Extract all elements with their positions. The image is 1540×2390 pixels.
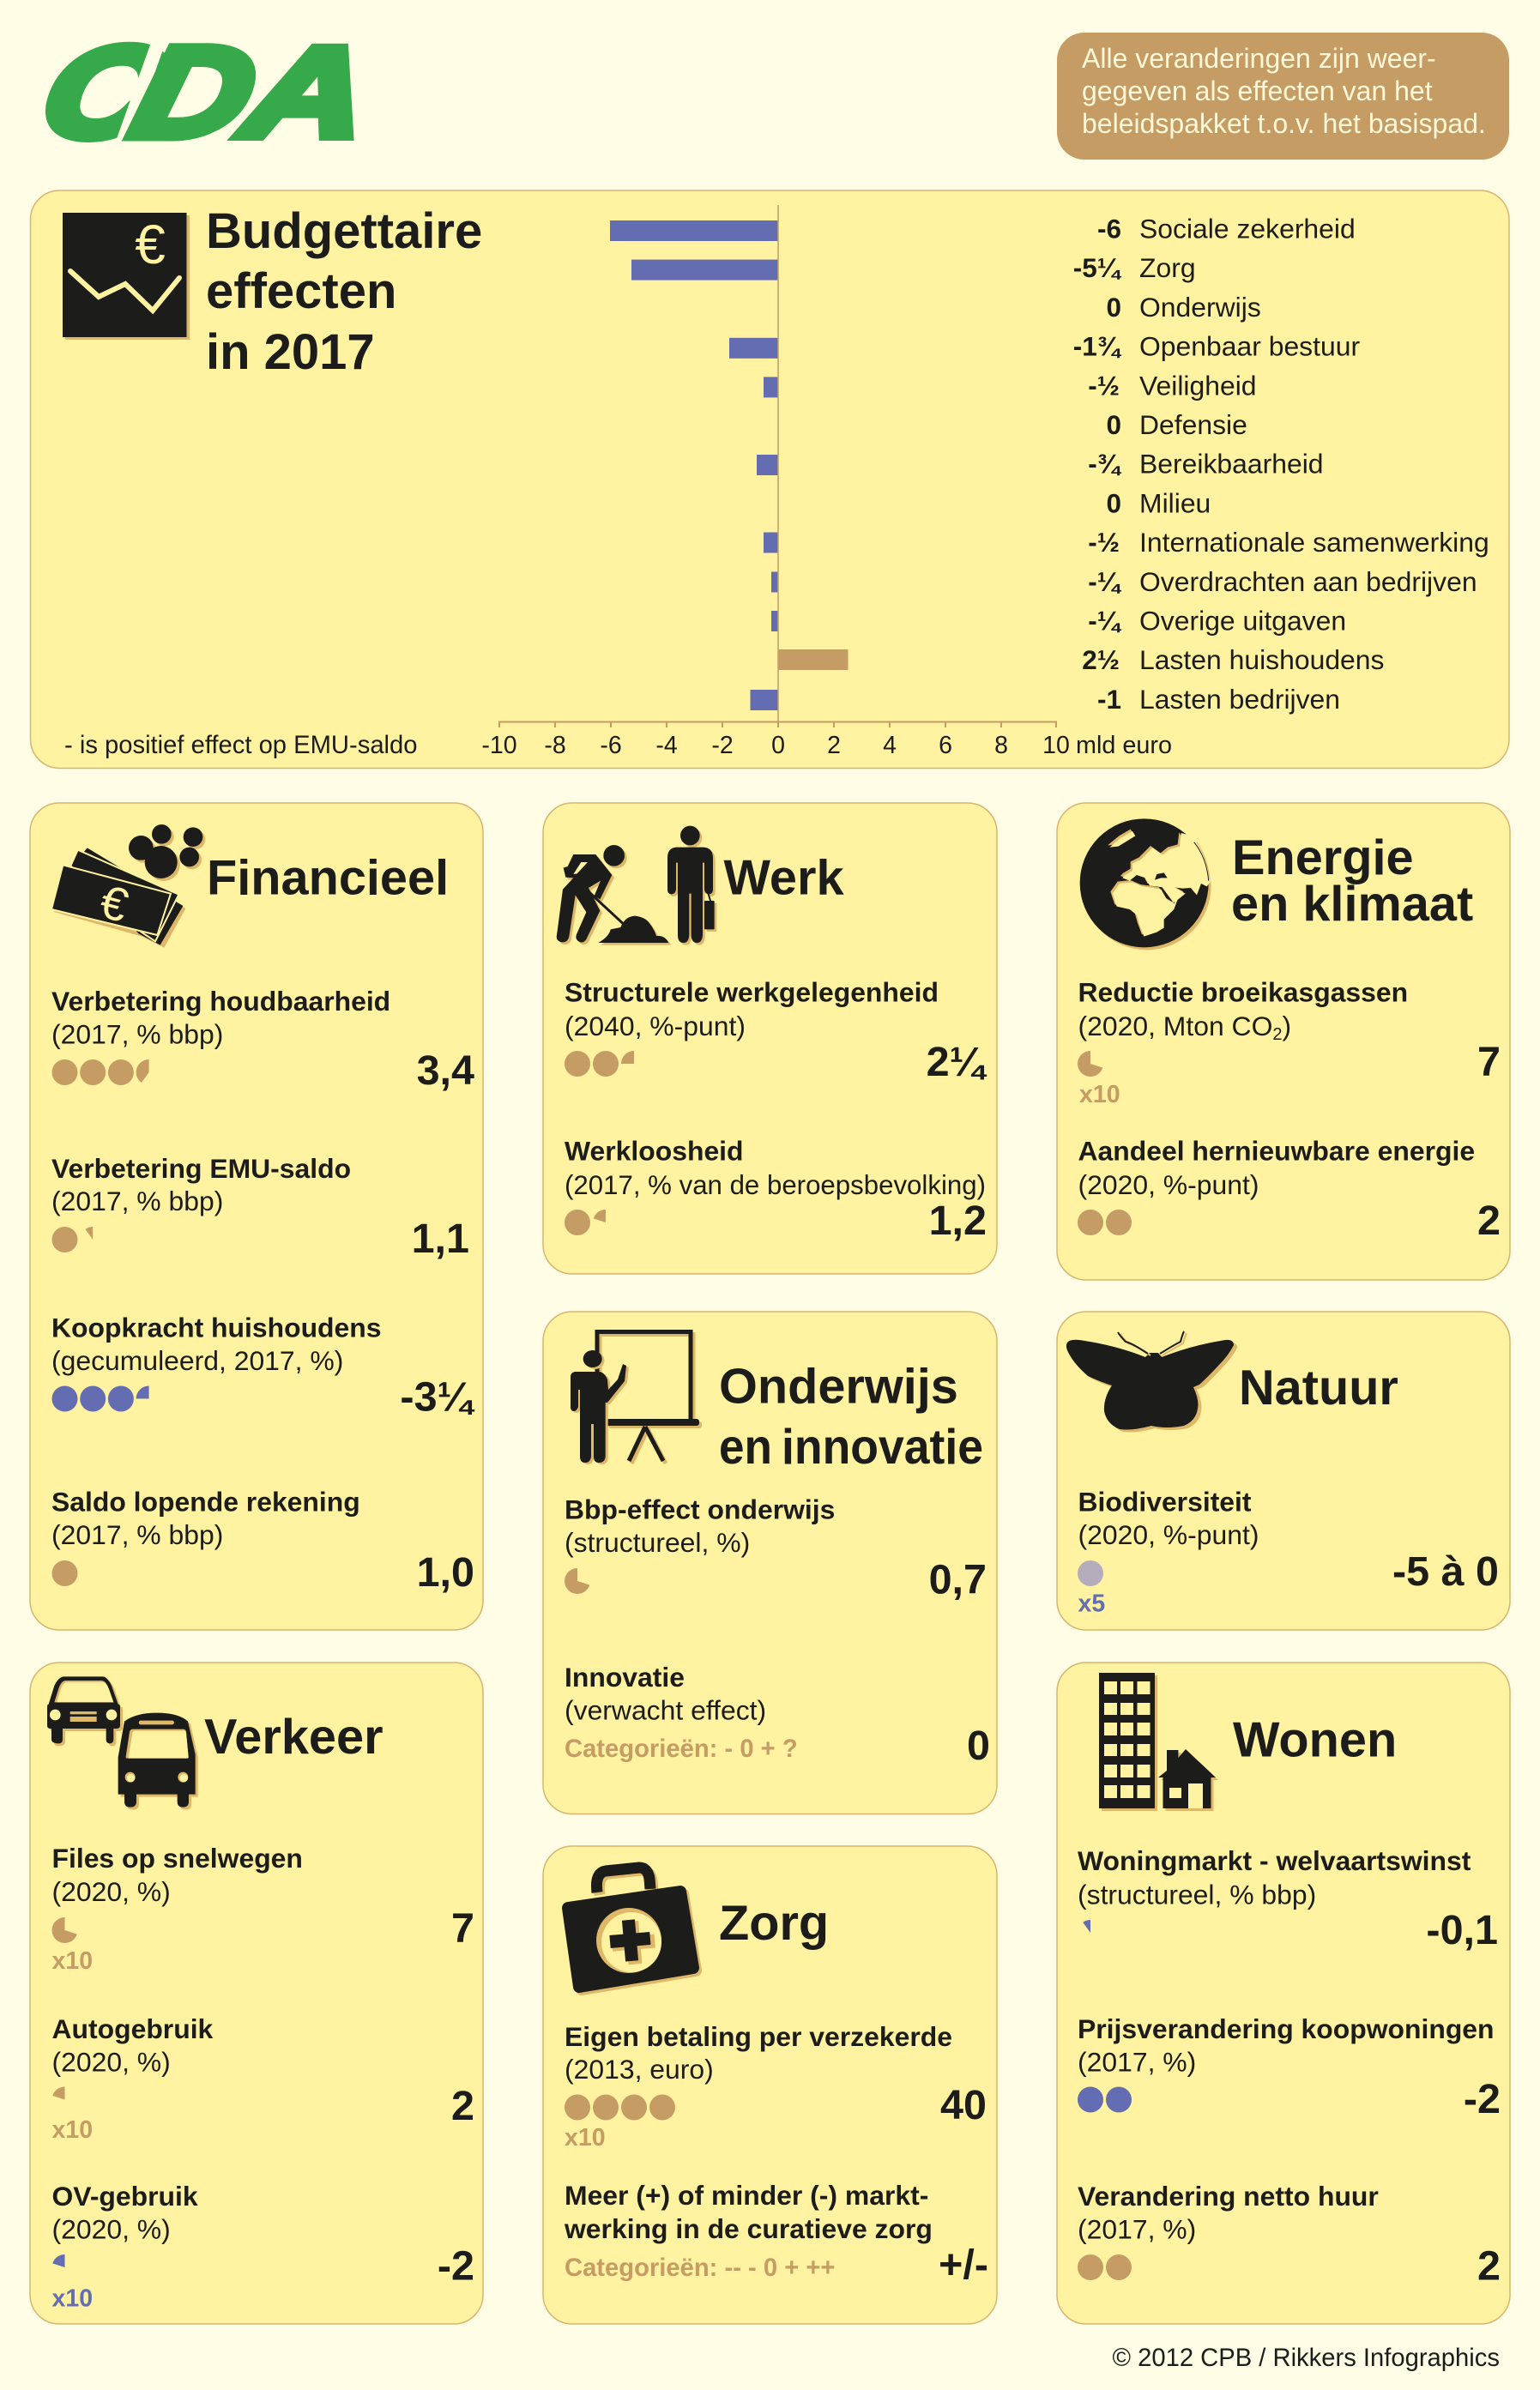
logo: CDA: C	[29, 20, 179, 164]
row: verbetering EMU-saldo: (2017, % bbp)	[51, 1186, 223, 1216]
panel: budgettaire effecten	[31, 190, 1509, 769]
heading: onderwijs en innovatie: innovatie	[782, 1420, 983, 1475]
row: verandering netto huur: (2017, %)	[1078, 2213, 1196, 2244]
heading: budgettaire effecten in 2017: in 2017	[206, 324, 375, 380]
bar chart: budgettaire effecten: 6	[939, 732, 952, 759]
values and category labels: -1	[1097, 684, 1121, 715]
heading: onderwijs en innovatie: en	[719, 1420, 772, 1475]
bar chart: budgettaire effecten: 4	[883, 732, 897, 759]
values and category labels: 0	[1106, 409, 1121, 440]
bar chart: budgettaire effecten: 0	[771, 732, 785, 759]
row: werkloosheid	[565, 1136, 987, 1244]
heading: natuur: Natuur	[1239, 1361, 1398, 1415]
row: structurele werkgelegenheid: (2040, %-punt)	[565, 1011, 746, 1041]
values and category labels: Lasten huishoudens	[1139, 644, 1384, 675]
heading: budgettaire effecten in 2017: Budgettaire	[206, 203, 482, 259]
row: verandering netto huur: 2	[1477, 2242, 1501, 2289]
panel: zorg	[543, 1846, 997, 2324]
row: structurele werkgelegenheid: Structurele werkgelegenheid	[565, 976, 939, 1007]
row: verbetering EMU-saldo: Verbetering EMU-saldo	[51, 1153, 351, 1184]
bar chart: budgettaire effecten	[481, 205, 1172, 759]
row: OV-gebruik	[51, 2181, 474, 2313]
row: files op snelwegen: x10	[51, 1947, 93, 1975]
values and category labels: -¾	[1088, 449, 1122, 480]
values and category labels: -¼	[1088, 606, 1122, 637]
bar chart: budgettaire effecten: -8	[544, 732, 566, 759]
bar chart: budgettaire effecten: 2	[827, 732, 841, 759]
row: woningmarkt welvaartswinst: -0,1	[1426, 1907, 1498, 1953]
row: OV-gebruik: x10	[51, 2285, 93, 2313]
panel: wonen	[1057, 1663, 1510, 2324]
values and category labels: -¼	[1088, 566, 1122, 597]
row: files op snelwegen: Files op snelwegen	[51, 1843, 303, 1874]
values and category labels: Veiligheid	[1139, 370, 1257, 401]
row: OV-gebruik: -2	[438, 2242, 474, 2289]
row: reductie broeikasgassen: 2	[1272, 1025, 1283, 1044]
row: woningmarkt welvaartswinst: Woningmarkt - welvaartswinst	[1078, 1845, 1471, 1876]
row: verbetering houdbaarheid	[51, 986, 474, 1094]
values and category labels: Zorg	[1139, 252, 1196, 283]
values and category labels: Bereikbaarheid	[1139, 449, 1324, 480]
heading: zorg: Zorg	[719, 1896, 829, 1951]
row: koopkracht huishoudens: -3¼	[400, 1374, 475, 1421]
row: files op snelwegen	[51, 1843, 474, 1975]
row: marktwerking curatieve zorg	[564, 2180, 988, 2288]
row: woningmarkt welvaartswinst: (structureel, % bbp)	[1078, 1879, 1316, 1910]
row: koopkracht huishoudens: Koopkracht huishoudens	[51, 1313, 381, 1343]
heading: onderwijs en innovatie	[719, 1359, 983, 1475]
bar chart: budgettaire effecten: 8	[994, 732, 1008, 759]
row: marktwerking curatieve zorg: Meer (+) of minder (-) markt-	[565, 2180, 928, 2211]
panel: verkeer	[30, 1663, 483, 2324]
bar chart: budgettaire effecten: -2	[711, 732, 734, 759]
panel: onderwijs en innovatie	[543, 1312, 997, 1814]
icon: globe	[1080, 818, 1213, 950]
row: verandering netto huur: Verandering netto huur	[1078, 2181, 1379, 2212]
row: autogebruik: x10	[51, 2116, 93, 2144]
icon: butterfly	[1066, 1331, 1237, 1433]
row: innovatie: 0	[967, 1723, 990, 1769]
row: werkloosheid: Werkloosheid	[565, 1136, 744, 1167]
row: aandeel hernieuwbare energie: (2020, %-punt)	[1078, 1169, 1259, 1200]
icon: money	[51, 824, 205, 948]
icon: apartment building and house	[1099, 1673, 1218, 1811]
bar chart: budgettaire effecten: 10	[1042, 732, 1070, 759]
row: werkloosheid: (2017, % van de beroepsbevolking)	[565, 1169, 986, 1200]
bar chart: budgettaire effecten: mld euro	[1076, 732, 1172, 759]
icon: euro chart	[63, 213, 190, 340]
row: biodiversiteit: -5 à 0	[1392, 1548, 1499, 1595]
row: marktwerking curatieve zorg: werking in de curatieve zorg	[564, 2213, 933, 2244]
heading: financieel: Financieel	[207, 851, 449, 906]
row: OV-gebruik: (2020, %)	[51, 2213, 171, 2244]
panel: energie en klimaat	[1057, 803, 1510, 1280]
heading: energie en klimaat	[1231, 830, 1473, 932]
footer: copyright: © 2012 CPB / Rikkers Infographics	[1112, 2345, 1500, 2372]
row: autogebruik: Autogebruik	[51, 2013, 214, 2044]
row: reductie broeikasgassen: x10	[1079, 1081, 1120, 1108]
row: prijsverandering koopwoningen: -2	[1464, 2076, 1501, 2122]
row: prijsverandering koopwoningen: (2017, %)	[1078, 2047, 1196, 2078]
icon: first aid case	[568, 1868, 696, 1989]
values and category labels: Sociale zekerheid	[1139, 213, 1356, 244]
panel: natuur	[1057, 1312, 1510, 1630]
row: reductie broeikasgassen: 7	[1477, 1039, 1501, 1085]
values and category labels: Internationale samenwerking	[1139, 527, 1489, 558]
values and category labels: Openbaar bestuur	[1139, 331, 1360, 362]
row: verbetering houdbaarheid: Verbetering houdbaarheid	[51, 986, 390, 1017]
row: biodiversiteit: Biodiversiteit	[1078, 1486, 1252, 1517]
row: prijsverandering koopwoningen	[1078, 2013, 1501, 2122]
row: reductie broeikasgassen: Reductie broeikasgassen	[1078, 976, 1408, 1007]
row: innovatie: Categorieën: - 0 + ?	[565, 1735, 798, 1763]
note: EMU-saldo: - is positief effect op EMU-saldo	[64, 732, 418, 759]
values and category labels: -½	[1088, 370, 1120, 401]
bar chart: budgettaire effecten: -4	[655, 732, 678, 759]
row: autogebruik: (2020, %)	[51, 2047, 171, 2078]
row: koopkracht huishoudens: (gecumuleerd, 2017, %)	[51, 1345, 343, 1376]
row: autogebruik: 2	[451, 2083, 474, 2129]
row: structurele werkgelegenheid	[565, 976, 987, 1085]
values and category labels: Lasten bedrijven	[1139, 684, 1340, 715]
row: OV-gebruik: OV-gebruik	[51, 2181, 198, 2212]
row: reductie broeikasgassen: )	[1283, 1011, 1291, 1041]
row: innovatie: (verwacht effect)	[565, 1695, 766, 1726]
heading: wonen: Wonen	[1233, 1712, 1397, 1767]
row: structurele werkgelegenheid: 2¼	[927, 1039, 987, 1085]
row: eigen betaling per verzekerde: Eigen betaling per verzekerde	[565, 2021, 952, 2052]
values and category labels: 0	[1106, 487, 1121, 518]
icon: teacher at board	[571, 1331, 702, 1464]
row: marktwerking curatieve zorg: +/-	[939, 2242, 988, 2288]
row: bbp-effect onderwijs: 0,7	[929, 1556, 987, 1602]
values and category labels	[1073, 213, 1489, 715]
values and category labels: Milieu	[1139, 487, 1211, 518]
row: biodiversiteit: (2020, %-punt)	[1078, 1519, 1259, 1550]
values and category labels: 2½	[1082, 644, 1120, 675]
row: biodiversiteit: x5	[1078, 1590, 1105, 1618]
row: prijsverandering koopwoningen: Prijsverandering koopwoningen	[1078, 2013, 1495, 2044]
row: eigen betaling per verzekerde	[565, 2021, 987, 2152]
row: innovatie	[565, 1662, 990, 1769]
logo: CDA: D	[120, 21, 269, 164]
panel: werk	[543, 803, 997, 1274]
row: marktwerking curatieve zorg: Categorieën: -- - 0 + ++	[565, 2254, 835, 2282]
heading: energie en klimaat: Energie	[1232, 830, 1414, 885]
callout: explanation: gegeven als effecten van het	[1082, 75, 1433, 106]
icon: car and bus	[47, 1676, 198, 1810]
heading: werk: Werk	[724, 851, 844, 906]
row: aandeel hernieuwbare energie	[1078, 1136, 1501, 1244]
row: saldo lopende rekening	[51, 1486, 474, 1596]
row: innovatie: Innovatie	[565, 1662, 685, 1693]
values and category labels: Defensie	[1139, 409, 1247, 440]
row: files op snelwegen: (2020, %)	[51, 1876, 171, 1907]
values and category labels: -6	[1097, 213, 1121, 244]
heading: verkeer: Verkeer	[204, 1710, 383, 1765]
row: bbp-effect onderwijs: Bbp-effect onderwijs	[565, 1494, 835, 1525]
heading: budgettaire effecten in 2017: effecten	[206, 263, 396, 319]
row: eigen betaling per verzekerde: x10	[565, 2124, 606, 2152]
heading: energie en klimaat: en klimaat	[1231, 877, 1473, 932]
row: verbetering EMU-saldo	[51, 1153, 469, 1262]
heading: onderwijs en innovatie: Onderwijs	[719, 1359, 958, 1414]
row: eigen betaling per verzekerde: 40	[940, 2082, 987, 2128]
row: saldo lopende rekening: Saldo lopende rekening	[51, 1486, 360, 1517]
values and category labels: -1¾	[1073, 331, 1122, 362]
callout: explanation	[1057, 33, 1509, 160]
row: verbetering EMU-saldo: 1,1	[412, 1216, 469, 1262]
values and category labels: -½	[1088, 527, 1120, 558]
values and category labels: -5¼	[1073, 252, 1122, 283]
logo: CDA	[29, 20, 378, 164]
row: woningmarkt welvaartswinst	[1078, 1845, 1498, 1953]
logo: CDA: A	[232, 21, 378, 164]
icon: worker and businessman	[557, 826, 716, 945]
row: saldo lopende rekening: (2017, % bbp)	[51, 1519, 223, 1550]
bar chart: budgettaire effecten: -6	[600, 732, 622, 759]
row: aandeel hernieuwbare energie: 2	[1477, 1198, 1501, 1244]
row: verbetering houdbaarheid: (2017, % bbp)	[51, 1019, 223, 1050]
icon: euro chart: €	[135, 214, 166, 275]
panel: financieel	[30, 803, 483, 1630]
row: aandeel hernieuwbare energie: Aandeel hernieuwbare energie	[1078, 1136, 1475, 1167]
row: werkloosheid: 1,2	[929, 1198, 987, 1244]
values and category labels: 0	[1106, 292, 1121, 323]
bar chart: budgettaire effecten: -10	[481, 732, 517, 759]
callout: explanation: Alle veranderingen zijn weer-	[1082, 43, 1436, 74]
row: files op snelwegen: 7	[451, 1905, 474, 1952]
row: biodiversiteit	[1078, 1486, 1499, 1618]
callout: explanation: beleidspakket t.o.v. het basispad.	[1082, 108, 1486, 139]
row: bbp-effect onderwijs	[565, 1494, 987, 1602]
row: saldo lopende rekening: 1,0	[417, 1549, 474, 1596]
icon: money: €	[94, 874, 134, 932]
values and category labels: Overige uitgaven	[1139, 606, 1346, 637]
heading: budgettaire effecten in 2017	[206, 203, 482, 380]
row: koopkracht huishoudens	[51, 1313, 475, 1421]
row: eigen betaling per verzekerde: (2013, euro)	[565, 2054, 714, 2085]
values and category labels: Onderwijs	[1139, 292, 1261, 323]
row: reductie broeikasgassen: (2020, Mton CO	[1078, 1011, 1272, 1041]
row: verbetering houdbaarheid: 3,4	[417, 1047, 474, 1094]
row: verandering netto huur	[1078, 2181, 1501, 2289]
row: reductie broeikasgassen	[1078, 976, 1501, 1108]
row: autogebruik	[51, 2013, 474, 2144]
values and category labels: Overdrachten aan bedrijven	[1139, 566, 1477, 597]
row: bbp-effect onderwijs: (structureel, %)	[565, 1527, 750, 1558]
